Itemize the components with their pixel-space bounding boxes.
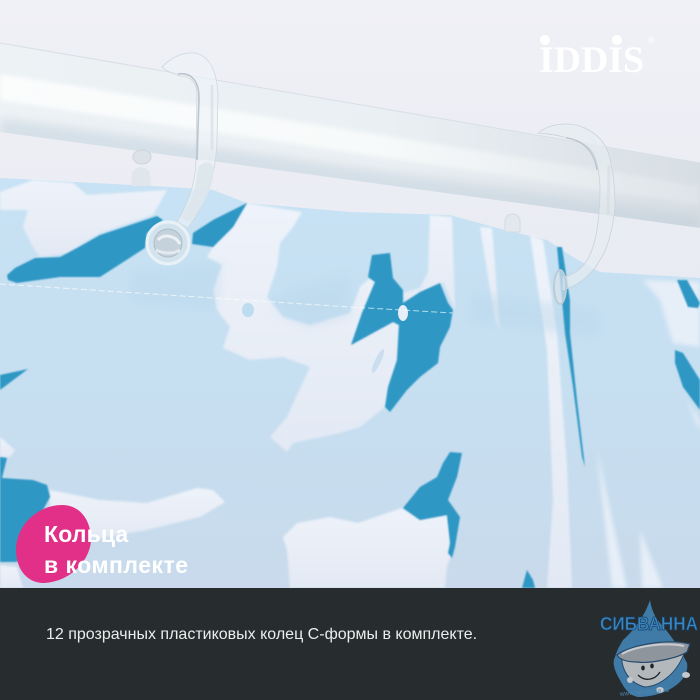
badge heading: Кольца bbox=[44, 521, 128, 547]
pink badge bbox=[16, 505, 91, 583]
brand logo: ® bbox=[648, 35, 655, 45]
hem stitch line bbox=[0, 284, 453, 313]
ring left bbox=[131, 53, 218, 264]
teal camouflage patches bbox=[0, 203, 700, 588]
badge heading bbox=[44, 521, 189, 578]
watermark logo: www.sibvanna.ru bbox=[619, 687, 670, 698]
seam dot bbox=[398, 305, 408, 321]
ring left drops behind rail bbox=[131, 150, 151, 186]
badge heading: в комплекте bbox=[44, 552, 189, 578]
curtain rail bbox=[0, 43, 700, 240]
ring left eyelet bbox=[147, 222, 189, 264]
ring right bbox=[505, 124, 615, 304]
white camouflage patches bbox=[0, 180, 572, 588]
small fabric spots bbox=[242, 303, 386, 374]
hem shading bbox=[130, 262, 600, 338]
footer band bbox=[0, 588, 700, 700]
ring right drop behind rail bbox=[505, 214, 520, 232]
curtain fabric bbox=[0, 178, 700, 590]
blurred right-side white patches bbox=[597, 280, 700, 588]
footer caption: 12 прозрачных пластиковых колец С-формы в комплекте. bbox=[46, 626, 477, 643]
brand logo: IDDIS bbox=[539, 40, 644, 81]
ring right eyelet bbox=[554, 270, 566, 304]
watermark logo bbox=[600, 600, 698, 698]
watermark logo: СИБВАННА bbox=[600, 614, 698, 634]
